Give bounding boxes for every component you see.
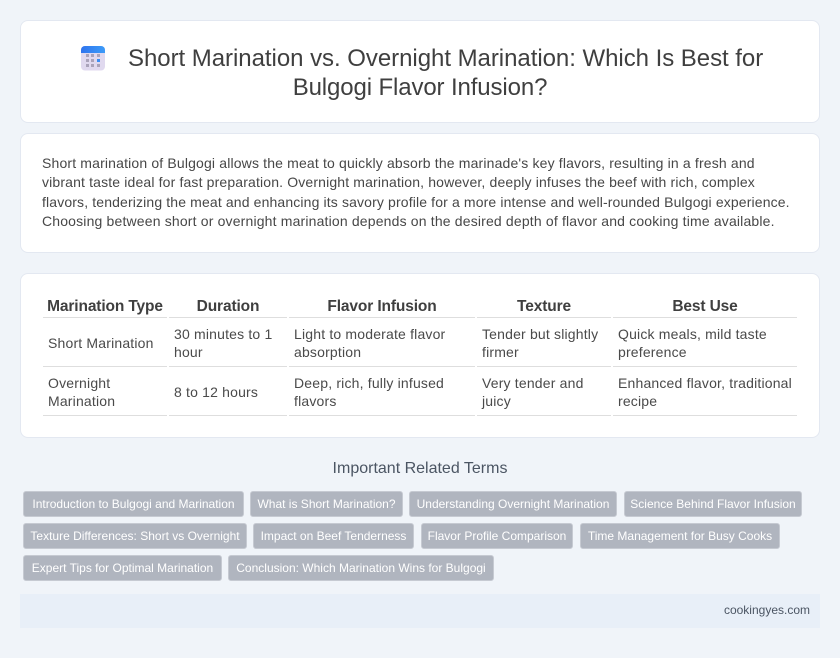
related terms tags: Texture Differences: Short vs Overnight: [30, 529, 240, 543]
table row: overnight marination: flavors: [294, 393, 336, 409]
table row: short marination: absorption: [294, 344, 361, 360]
title: Bulgogi Flavor Infusion?: [293, 74, 547, 101]
text block: introduction: Choosing between short or overnight marination depends on the desired depth of flavor and cooking time available.: [42, 213, 775, 229]
text block: introduction: vibrant taste ideal for fast preparation. Overnight marination, however, deeply infuses the beef with rich, complex: [42, 174, 755, 190]
related terms tags: Conclusion: Which Marination Wins for Bulgogi: [236, 561, 486, 575]
related terms tags: Understanding Overnight Marination: [417, 497, 609, 511]
table row: overnight marination: [48, 375, 792, 409]
related terms tags: [23, 491, 802, 581]
footer source: cookingyes.com: [724, 603, 810, 617]
table row: overnight marination: Enhanced flavor, traditional: [618, 375, 792, 391]
related terms tags: Flavor Profile Comparison: [428, 529, 566, 543]
title: Short Marination vs. Overnight Marination: Which Is Best for: [128, 45, 763, 72]
panel: comparison table: [20, 273, 820, 438]
table row: overnight marination: Overnight: [48, 375, 110, 391]
footer: [20, 594, 820, 628]
table row: short marination: Tender but slightly: [482, 326, 598, 342]
related terms tags: Science Behind Flavor Infusion: [630, 497, 796, 511]
table header row: Texture: [517, 298, 571, 315]
table row: overnight marination: Marination: [48, 393, 115, 409]
table header row: [47, 298, 738, 315]
table row: overnight marination: recipe: [618, 393, 657, 409]
table row: short marination: Quick meals, mild taste: [618, 326, 767, 342]
table row: short marination: Short Marination: [48, 335, 154, 351]
table row: short marination: hour: [174, 344, 203, 360]
related terms tags: Impact on Beef Tenderness: [261, 529, 406, 543]
text block: introduction: flavors, tenderizing the meat and enhancing its savory profile for a more intense and well-rounded Bulgogi experience.: [42, 194, 790, 210]
related terms tags: Time Management for Busy Cooks: [588, 529, 772, 543]
related terms tags: What is Short Marination?: [257, 497, 396, 511]
panel: introduction: [20, 133, 820, 253]
table row: short marination: preference: [618, 344, 687, 360]
panel: header: [20, 20, 820, 123]
table row: overnight marination: Very tender and: [482, 375, 584, 391]
table header row: Duration: [197, 298, 259, 315]
text block: introduction: Short marination of Bulgogi allows the meat to quickly absorb the marinade's key flavors, resulting in a fresh and: [42, 155, 755, 171]
table header row: Best Use: [672, 298, 738, 315]
table row: short marination: Light to moderate flavor: [294, 326, 445, 342]
table row: short marination: 30 minutes to 1: [174, 326, 272, 342]
table header row: Marination Type: [47, 298, 163, 315]
title: [128, 45, 763, 101]
related terms tags: Introduction to Bulgogi and Marination: [32, 497, 235, 511]
table row: overnight marination: Deep, rich, fully infused: [294, 375, 444, 391]
related terms tags: Expert Tips for Optimal Marination: [32, 561, 213, 575]
table row: short marination: firmer: [482, 344, 519, 360]
table row: overnight marination: 8 to 12 hours: [174, 384, 258, 400]
heading: important related terms: Important Related Terms: [333, 460, 507, 477]
table header row: Flavor Infusion: [327, 298, 437, 315]
table row: overnight marination: juicy: [482, 393, 511, 409]
table row: short marination: [48, 326, 767, 360]
icon: calendar: [81, 46, 105, 70]
text block: introduction: [42, 155, 790, 229]
